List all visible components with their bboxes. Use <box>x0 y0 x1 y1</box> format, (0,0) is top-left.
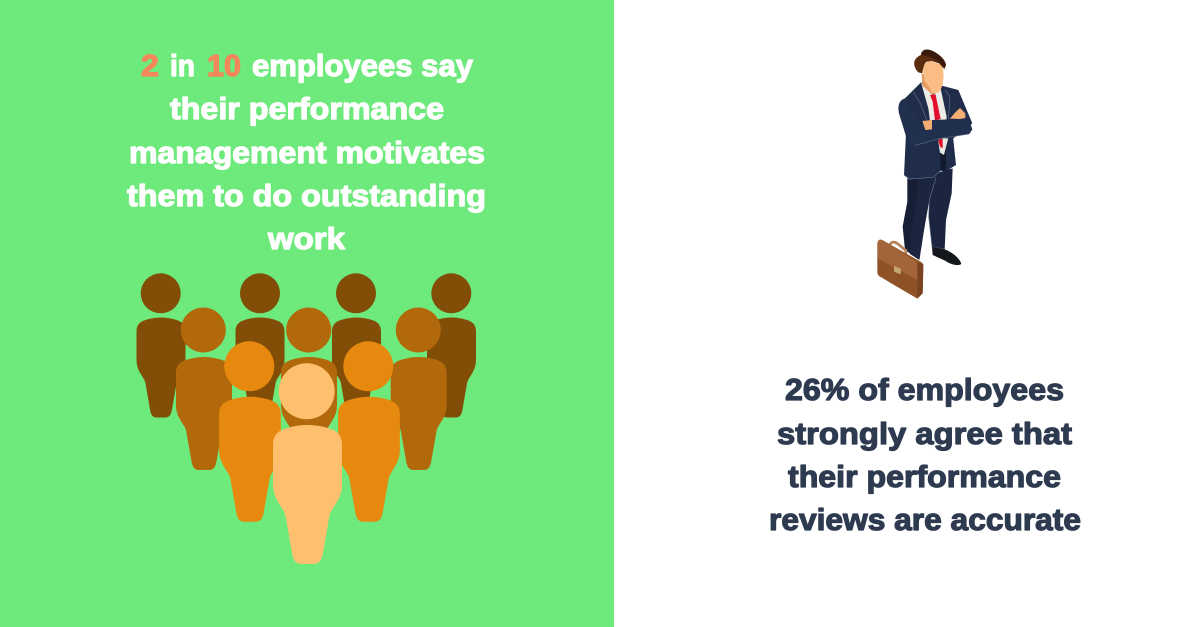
briefcase <box>877 240 923 299</box>
tie <box>930 94 941 120</box>
hair <box>914 49 946 73</box>
lower body and briefcase <box>877 133 961 299</box>
icon: group of employees <box>136 273 476 564</box>
left leg <box>903 173 938 260</box>
lapels <box>914 90 950 120</box>
text block: 26% of employees statistic: reviews are accurate <box>769 502 1081 537</box>
text block: 26% of employees statistic <box>769 372 1081 537</box>
heading: 2 in 10 employees statistic <box>127 48 486 256</box>
text block: 26% of employees statistic: their performance <box>788 459 1061 494</box>
third row of people <box>219 341 400 522</box>
jacket skirt <box>904 133 956 179</box>
torso jacket <box>899 82 972 138</box>
panel: green left panel <box>0 0 614 627</box>
shoe <box>932 247 961 265</box>
text block: 26% of employees statistic: strongly agree that <box>777 416 1072 451</box>
heading: 2 in 10 employees statistic: 2 <box>141 48 159 83</box>
shirt collar <box>921 82 947 138</box>
illustration: businessman with briefcase <box>877 49 972 299</box>
heading: 2 in 10 employees statistic: their performance <box>170 91 444 126</box>
front person <box>273 363 342 564</box>
back row of people <box>136 273 476 418</box>
face <box>922 60 944 94</box>
heading: 2 in 10 employees statistic: employees say <box>252 48 474 83</box>
heading: 2 in 10 employees statistic: management motivates <box>129 135 485 170</box>
left hand <box>922 120 932 130</box>
upper body <box>899 49 972 138</box>
heading: 2 in 10 employees statistic: in <box>170 48 195 83</box>
heading: 2 in 10 employees statistic: work <box>267 221 346 256</box>
trouser fly <box>940 147 946 171</box>
neck shadow <box>922 74 933 95</box>
text block: 26% of employees statistic: 26% of employees <box>785 372 1064 407</box>
heading: 2 in 10 employees statistic: them to do outstanding <box>127 178 486 213</box>
heading: 2 in 10 employees statistic: 10 <box>207 48 241 83</box>
crossed arms <box>898 98 972 147</box>
right leg <box>929 168 953 249</box>
second row of people <box>176 308 447 470</box>
shirt and tie bottom <box>938 137 949 155</box>
right hand <box>950 108 965 119</box>
